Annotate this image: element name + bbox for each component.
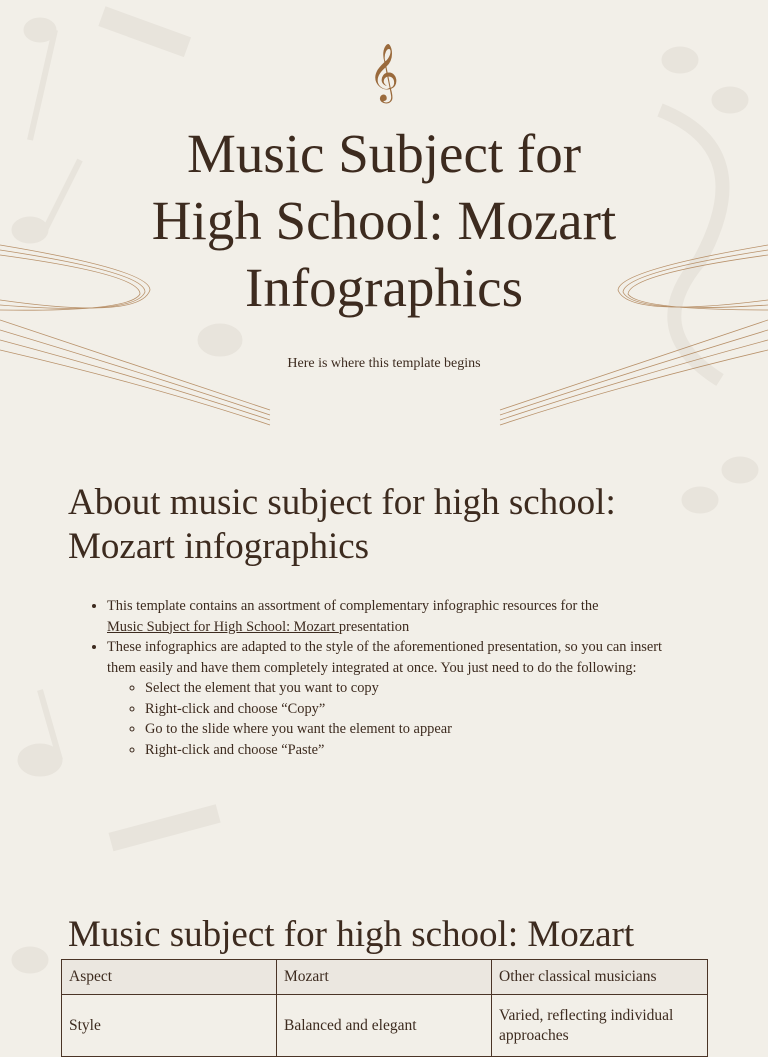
bullet list [92, 598, 662, 758]
table: Style [69, 1016, 101, 1034]
bullet list: Right-click and choose “Copy” [145, 700, 325, 716]
title: Infographics [245, 257, 523, 318]
heading: about: About music subject for high school: [68, 482, 616, 523]
table: Mozart [284, 968, 329, 985]
icon: treble clef: 𝄞 [369, 43, 399, 101]
title: High School: Mozart [152, 190, 616, 251]
bullet list: Go to the slide where you want the element to appear [145, 721, 452, 737]
heading: about: Mozart infographics [68, 526, 369, 567]
table [61, 959, 708, 1057]
bullet list: Music Subject for High School: Mozart presentation [107, 618, 409, 634]
table: Balanced and elegant [284, 1016, 417, 1034]
bullet list: These infographics are adapted to the style of the aforementioned presentation, so you can insert [107, 639, 662, 655]
bullet list: Right-click and choose “Paste” [145, 742, 324, 758]
bullet list: This template contains an assortment of complementary infographic resources for the [107, 598, 599, 614]
table: Varied, reflecting individual approaches [499, 1006, 673, 1044]
title [152, 123, 616, 318]
bullet list: Select the element that you want to copy [145, 680, 379, 696]
heading: about [68, 482, 616, 567]
table: Aspect [69, 968, 112, 985]
table: Other classical musicians [499, 968, 657, 985]
bullet list: them easily and have them completely integrated at once. You just need to do the following: [107, 660, 637, 676]
title: Music Subject for [187, 123, 581, 184]
subtitle: Here is where this template begins [287, 356, 481, 371]
heading: table: Music subject for high school: Mozart [68, 914, 634, 955]
